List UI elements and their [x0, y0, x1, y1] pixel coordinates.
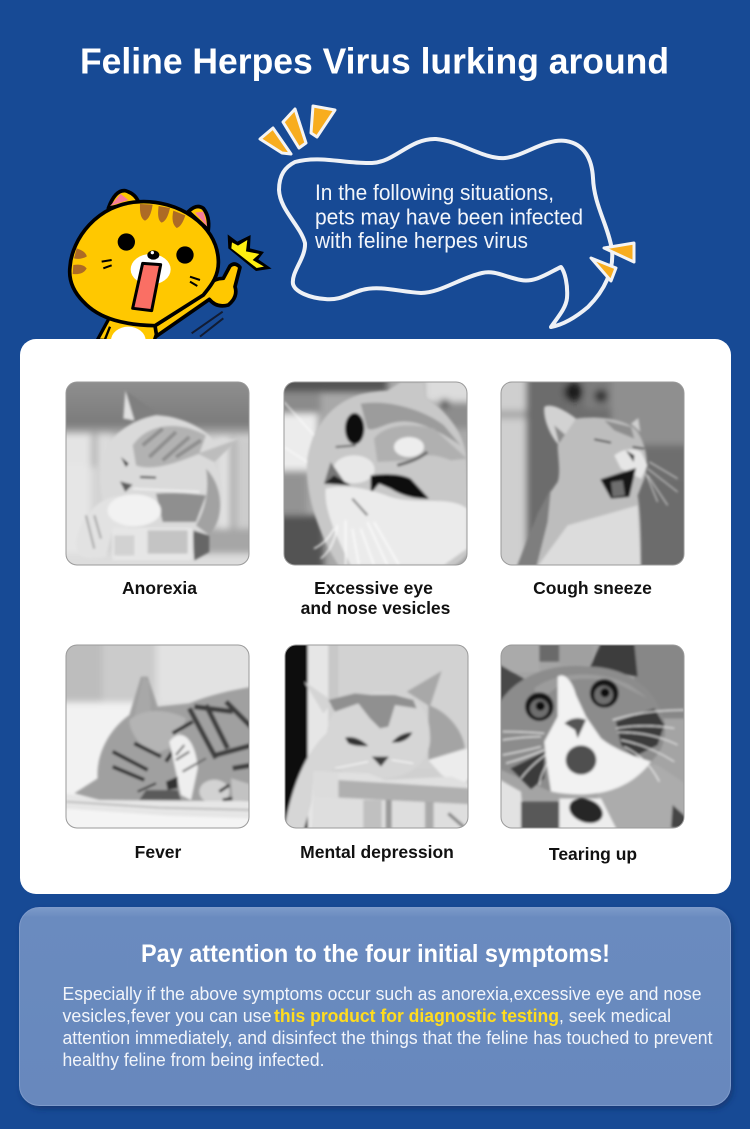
notice body text	[62, 984, 712, 1070]
photo: mental depression	[284, 644, 468, 828]
photo: anorexia	[66, 382, 250, 566]
notice body text: healthy feline from being infected.	[62, 1050, 324, 1070]
bubble outline	[279, 139, 612, 327]
notice heading: Pay attention to the four initial symptoms!	[141, 940, 610, 968]
notice body text: attention immediately, and disinfect the things that the feline has touched to prevent	[62, 1028, 712, 1048]
label: fever: Fever	[135, 842, 182, 862]
photo: tearing up	[500, 644, 684, 828]
label: excessive eye and nose vesicles: Excessive eye	[314, 578, 433, 598]
panel: symptoms card	[20, 339, 731, 894]
notice body text: this product for diagnostic testing	[274, 1006, 559, 1026]
label: anorexia: Anorexia	[122, 578, 197, 598]
label: tearing up: Tearing up	[549, 844, 637, 864]
icon: cartoon cat pointing	[70, 191, 272, 355]
photo: eye and nose vesicles	[284, 382, 468, 566]
label: excessive eye and nose vesicles: and nose vesicles	[301, 598, 451, 618]
bubble text: pets may have been infected	[315, 204, 583, 230]
title: Feline Herpes Virus lurking around	[80, 40, 669, 82]
bubble text: with feline herpes virus	[314, 228, 528, 253]
notice body text: vesicles,fever you can use	[62, 1006, 272, 1026]
notice body text: Especially if the above symptoms occur such as anorexia,excessive eye and nose	[62, 984, 702, 1004]
bubble text: In the following situations,	[315, 180, 554, 205]
label: cough sneeze: Cough sneeze	[533, 578, 652, 598]
label: mental depression: Mental depression	[300, 842, 454, 862]
exclamation ticks	[260, 106, 634, 281]
panel: attention notice	[20, 908, 730, 1106]
notice body text: , seek medical	[559, 1006, 671, 1026]
speech bubble	[260, 106, 634, 327]
photo: cough sneeze	[500, 382, 684, 566]
photo: fever	[66, 644, 250, 828]
